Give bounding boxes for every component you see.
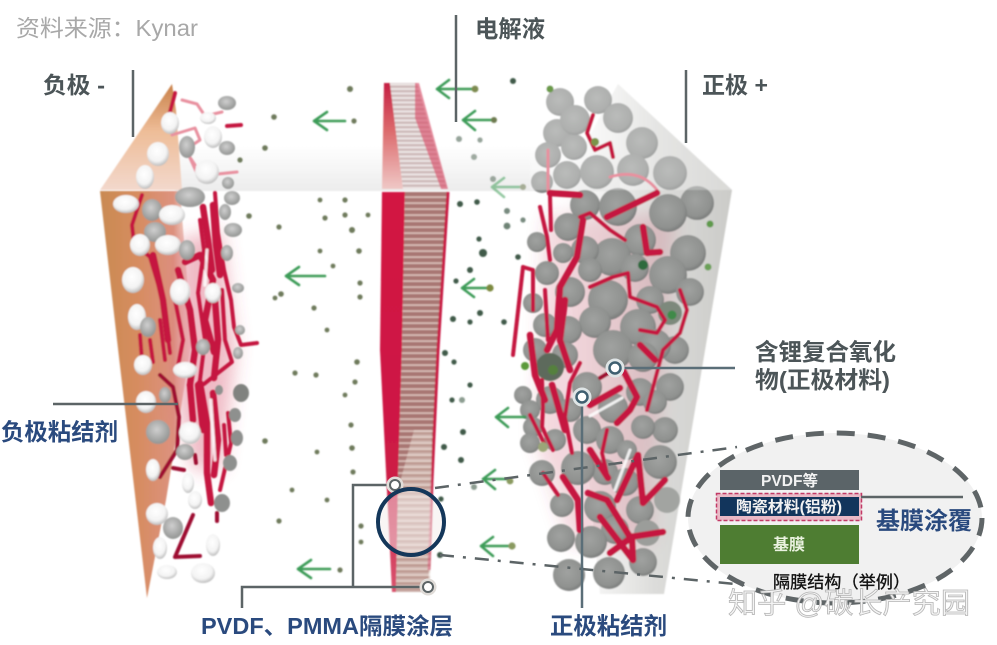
marker: separator top [388,478,402,492]
leader line: cathode binder [581,397,583,608]
label: PVDF PMMA separator coating: PVDF、PMMA隔膜涂层 [201,613,453,639]
layer: ceramic material: 陶瓷材料(铝粉) [736,497,842,516]
label: electrolyte: 电解液 [475,16,545,42]
label: lithium composite oxide: 含锂复合氧化 [755,339,896,365]
separator right edge [429,192,448,570]
panel: anode (negative electrode) [100,84,257,598]
label: anode: 负极 - [43,72,105,98]
panel: separator structure inset [688,433,982,603]
top haze of the cathode box [530,84,732,190]
copper foil lower face [100,191,192,598]
leader line: base film coating [861,496,963,498]
watermark: 知乎 @碳长产究园 [728,587,970,620]
dash-dot zoom line upper [435,447,737,488]
marker: separator bottom [421,580,435,594]
marker: cathode binder [574,389,590,405]
leader line: anode [132,70,134,137]
layer: base film: 基膜 [773,536,805,554]
binder strands: anode [132,93,257,521]
label: cathode binder: 正极粘结剂 [550,613,667,639]
dash-dot zoom line lower [440,555,745,585]
layer: PVDF [720,470,859,490]
leader line: cathode [685,70,687,143]
separator lightened lower section [396,430,432,592]
binder haze: cathode [535,215,675,545]
magnifier circle on separator [378,489,444,555]
lithium ions embedded in the cathode [521,86,714,452]
ion movement arrows [286,80,526,578]
separator upper stripes [390,83,447,189]
label: lithium composite oxide: 物(正极材料) [755,367,890,393]
separator upper red face [382,83,403,189]
label: lithium composite oxide [755,339,896,393]
inset dashed ellipse [688,433,982,603]
copper foil upper face [100,84,182,190]
title: source: 资料来源：Kynar [16,15,198,41]
circle zone tint [380,491,442,553]
lithium ions: left region [237,86,370,573]
binder strands: cathode [513,115,687,560]
background haze band [175,145,620,191]
layer: PVDF: PVDF等 [761,471,818,490]
leader line: electrolyte [455,15,457,122]
active particles: cathode [514,86,714,591]
label: anode binder: 负极粘结剂 [1,419,118,445]
binder strand over particles [175,515,200,557]
cathode current collector [560,84,732,594]
separator upper right pink face [415,83,448,189]
layer: ceramic material [716,494,862,520]
label: cathode: 正极 + [702,72,768,98]
lithium ions: right region [437,78,526,558]
layer: base film [720,525,859,564]
leader bracket: separator coating [242,485,428,608]
marker: cathode material [607,360,623,376]
separator lower stripes [396,192,448,592]
leader line: cathode material [615,367,735,369]
panel: separator [380,83,448,592]
panel: cathode (positive electrode) [513,84,732,594]
binder haze: anode [176,230,236,470]
label: base film coating: 基膜涂覆 [876,507,972,535]
label: separator structure example: 隔膜结构（举例） [773,573,910,592]
separator lower red face [380,192,405,592]
leader line: anode binder [53,403,178,405]
active particles: anode [113,96,249,583]
